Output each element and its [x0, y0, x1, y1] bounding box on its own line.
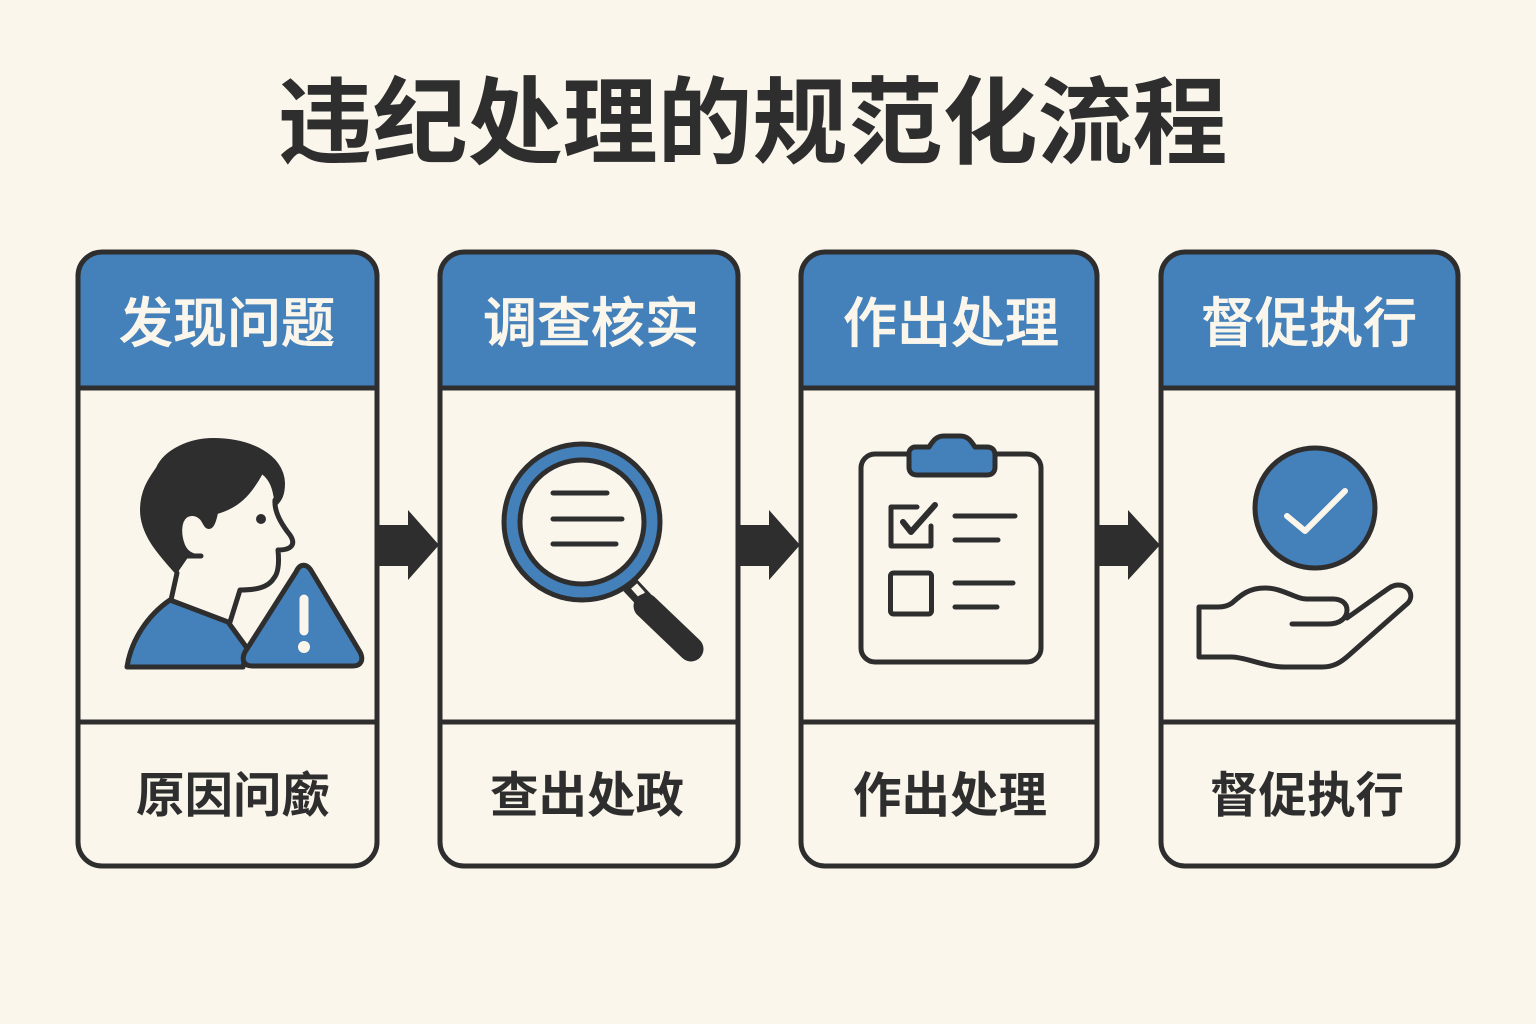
header band: step 4 — [1161, 251, 1458, 387]
card outline: step 4 — [1161, 252, 1458, 866]
label: step 2: 查出处政 — [490, 769, 684, 823]
arrow: step 3 to step 4 — [1097, 510, 1160, 580]
label: step 4: 督促执行 — [1210, 769, 1404, 823]
icon: clipboard checklist — [861, 436, 1041, 662]
label: step 1: 原因问廞 — [136, 769, 330, 823]
header band: step 1 — [78, 251, 377, 387]
arrow: step 2 to step 3 — [738, 510, 800, 580]
label: step 3: 作出处理 — [853, 769, 1047, 823]
title: 违纪处理的规范化流程 — [277, 71, 1228, 177]
divider: step 3 header — [801, 388, 1097, 722]
card outline: step 3 — [801, 252, 1097, 866]
heading: step 1: 发现问题 — [119, 294, 335, 354]
header band: step 2 — [440, 251, 739, 387]
panel: step 3 作出处理 — [800, 251, 1097, 866]
icon: magnifying glass — [504, 444, 691, 649]
heading: step 2: 调查核实 — [483, 294, 699, 354]
panel: step 2 调查核实 — [440, 251, 739, 866]
heading: step 3: 作出处理 — [843, 294, 1059, 354]
card outline: step 1 — [78, 252, 377, 866]
divider: step 2 header — [440, 388, 738, 722]
divider: step 1 header — [78, 388, 377, 722]
icon: person with warning triangle — [127, 439, 362, 667]
card outline: step 2 — [440, 252, 738, 866]
panel: step 1 发现问题 — [78, 251, 377, 866]
header band: step 3 — [800, 251, 1097, 387]
panel: step 4 督促执行 — [1161, 251, 1458, 866]
divider: step 4 header — [1161, 388, 1458, 722]
icon: hand holding check badge — [1199, 448, 1411, 667]
arrow: step 1 to step 2 — [377, 510, 439, 580]
heading: step 4: 督促执行 — [1201, 294, 1417, 354]
